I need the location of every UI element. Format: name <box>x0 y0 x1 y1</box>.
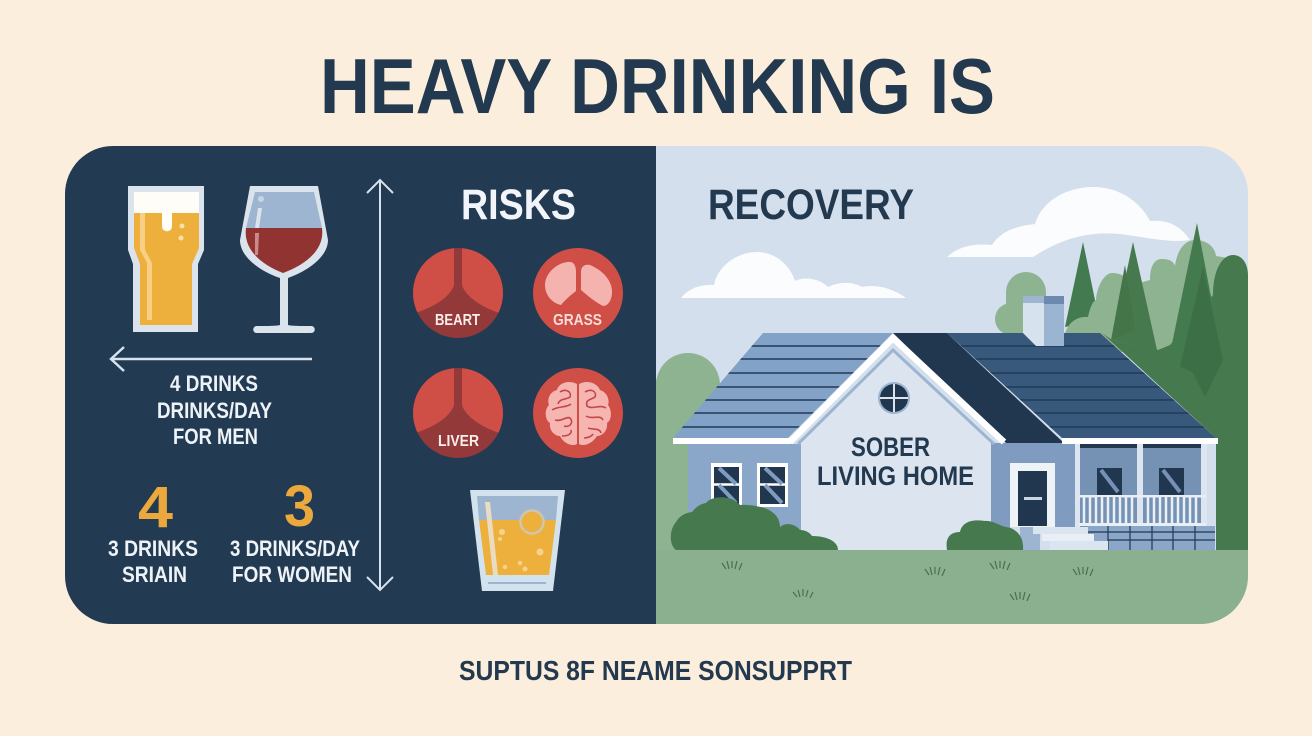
railing <box>1079 495 1206 526</box>
text: men limit: DRINKS/DAY <box>157 398 272 423</box>
text: stat 3 caption: 3 DRINKS/DAY <box>230 536 360 561</box>
panel: main split card <box>65 146 1248 624</box>
left eave <box>673 438 791 444</box>
grass tufts <box>722 561 1093 601</box>
text: men limit: 4 DRINKS <box>170 371 258 396</box>
panel: right sky background <box>656 146 1248 624</box>
chimney <box>1023 296 1064 333</box>
text: men limit <box>158 376 272 444</box>
arrow: vertical double <box>367 180 393 590</box>
gable trim <box>790 338 1004 442</box>
gable trim shadow <box>798 350 994 444</box>
heading: recovery: RECOVERY <box>708 181 914 229</box>
footer text: SUPTUS 8F NEAME SONSUPPRT <box>459 655 852 686</box>
tree: left round <box>656 353 720 550</box>
trees: background foliage <box>995 223 1248 550</box>
text: stat 4 caption <box>108 540 198 582</box>
text: men limit: FOR MEN <box>173 424 258 449</box>
panel: left dark background <box>65 146 656 624</box>
icon: heart risk circle: BEART <box>435 312 480 329</box>
heading: risks: RISKS <box>461 181 576 229</box>
house sign text: SOBER <box>851 432 930 462</box>
dark roof valley <box>893 333 1064 443</box>
text: stat 3 caption <box>230 536 360 587</box>
text: stat 4 caption: SRIAIN <box>122 562 187 587</box>
icon: liver risk circle <box>405 360 510 458</box>
arrow: horizontal left <box>111 347 312 371</box>
icon: lungs risk circle: GRASS <box>553 312 602 329</box>
cloud: small <box>681 252 906 298</box>
gable wall <box>801 347 991 550</box>
title: HEAVY DRINKING IS <box>320 42 995 130</box>
icon: wine glass <box>240 186 328 333</box>
bush: centre <box>947 520 1023 550</box>
left windows <box>711 463 788 507</box>
porch <box>1062 438 1218 550</box>
text: stat 4 caption: 3 DRINKS <box>108 536 198 561</box>
icon: liver risk circle: LIVER <box>438 433 479 450</box>
cloud: large <box>947 187 1190 257</box>
bush: left <box>671 497 838 550</box>
house sign text: LIVING HOME <box>817 461 974 491</box>
round window <box>878 382 910 414</box>
stat: 3: 3 <box>284 474 315 539</box>
house <box>660 296 1230 550</box>
left roof <box>660 333 900 438</box>
icon: brain risk circle <box>533 368 623 458</box>
front steps <box>1020 527 1108 550</box>
house sign text <box>818 437 974 486</box>
door <box>1010 463 1055 527</box>
text: stat 3 caption: FOR WOMEN <box>232 562 352 587</box>
lawn <box>656 550 1248 624</box>
left wing wall <box>688 444 801 530</box>
icon: tumbler glass <box>470 490 565 591</box>
right roof <box>947 333 1216 438</box>
icon: beer glass <box>128 186 204 332</box>
icon: heart risk circle <box>405 240 510 338</box>
stat: 4: 4 <box>138 475 173 540</box>
porch base <box>1088 526 1215 550</box>
right wing wall <box>991 443 1075 527</box>
icon: lungs risk circle <box>533 248 623 338</box>
